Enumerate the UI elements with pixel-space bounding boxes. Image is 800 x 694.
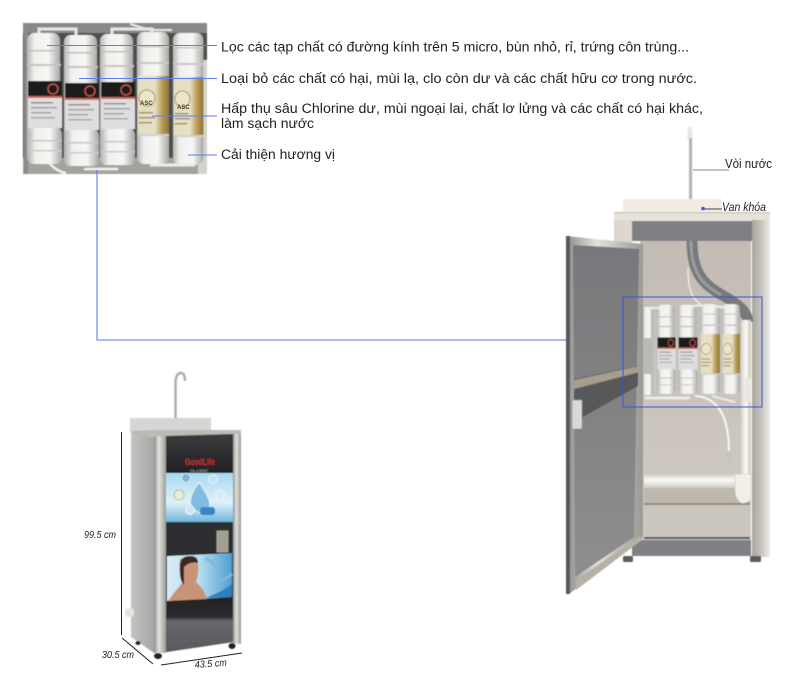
woman photo banner: [167, 553, 232, 601]
rear tray: [130, 418, 211, 432]
dimension: depth: [102, 638, 153, 664]
logo: [185, 457, 215, 473]
open cabinet machine: [566, 126, 770, 594]
faucet: [686, 126, 702, 211]
label: shut-off valve: Van khóa: [722, 202, 766, 214]
logo: GoodLife: [185, 457, 215, 468]
dispenser cup slot: [217, 531, 228, 552]
small cartridges: [643, 304, 740, 402]
corrugated hose: [692, 241, 748, 322]
closed machine front view: [125, 373, 241, 659]
pillars: [614, 220, 632, 280]
label text on gold cartridges: [140, 101, 190, 111]
feet: [154, 653, 162, 659]
label: shut-off valve: [701, 202, 766, 214]
horizontal white pipe: [644, 475, 736, 488]
label text on gold cartridges: ASC: [140, 101, 153, 107]
rear tray and top: [623, 199, 722, 212]
dimension: depth: 30.5 cm: [102, 650, 134, 661]
label text on gold cartridges: ASC: [177, 105, 190, 111]
interior: [640, 241, 751, 541]
open door: [566, 236, 643, 594]
callout text: filter 3: [221, 101, 703, 131]
blue banner: [166, 473, 233, 522]
dimension: height: 99.5 cm: [84, 530, 116, 541]
drain knob: [125, 608, 134, 617]
callout text: filter 3: làm sạch nước: [221, 116, 314, 131]
callout text: filter 2: Loại bỏ các chất có hại, mùi lạ, clo còn dư và các chất hữu cơ trong nước.: [221, 71, 697, 86]
logo: GL-L9057: [190, 468, 209, 473]
dimension: width: 43.5 cm: [194, 658, 227, 671]
side panel: [131, 433, 154, 653]
callout lines from cartridges: [47, 46, 217, 155]
top plate: [131, 430, 241, 438]
glass front: [166, 434, 233, 652]
callout text: filter 1: Lọc các tạp chất có đường kính trên 5 micro, bùn nhỏ, rỉ, trứng côn trùng...: [221, 40, 689, 54]
label: faucet: [693, 157, 772, 171]
label: faucet: Vòi nước: [725, 157, 772, 171]
faucet: [168, 373, 188, 430]
photo: filter cartridges close-up: [23, 23, 207, 174]
dimension: width: [161, 653, 242, 671]
callout text: filter 4: Cải thiện hương vị: [221, 147, 335, 162]
connector line to cabinet detail: [97, 170, 623, 340]
detail frame around cartridges: [623, 297, 762, 407]
vertical white pipe: [741, 320, 751, 485]
front pillars: [154, 436, 166, 653]
callout text: filter 3: Hấp thụ sâu Chlorine dư, mùi ngoại lai, chất lơ lửng và các chất có hại khác,: [221, 101, 703, 116]
base: [632, 540, 751, 556]
water tube: [695, 396, 729, 452]
